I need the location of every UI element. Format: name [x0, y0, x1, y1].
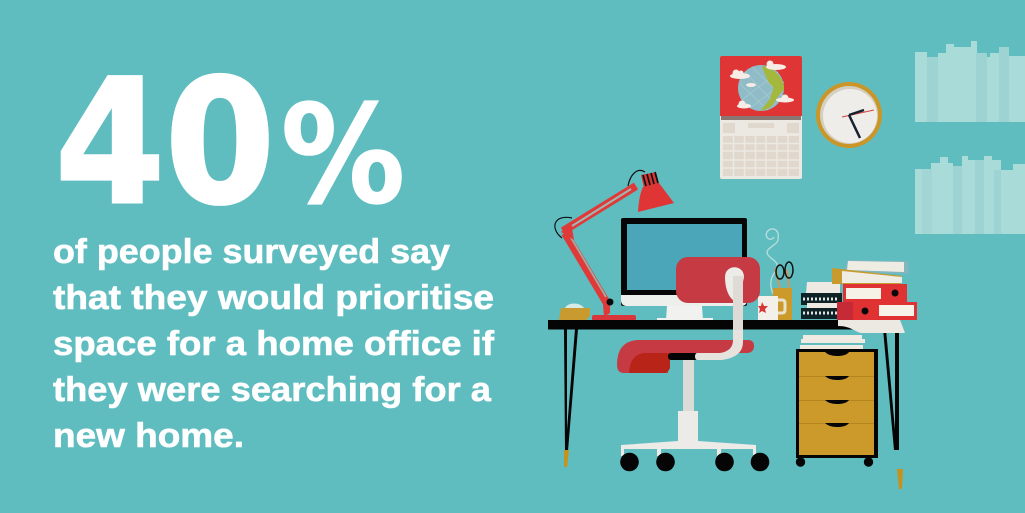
- icon: lower bookshelf: [915, 156, 1025, 234]
- icon: desk lamp: [555, 170, 674, 321]
- description text block: [53, 233, 495, 455]
- description text block: they were searching for a: [53, 371, 492, 409]
- description text block: space for a home office if: [53, 325, 495, 363]
- description text block: that they would prioritise: [53, 279, 494, 317]
- headline statistic: 40%: 40: [55, 42, 275, 243]
- icon: letter tray with papers: [801, 282, 842, 319]
- description text block: new home.: [53, 417, 244, 455]
- icon: papers on drawer unit: [800, 335, 865, 349]
- icon: stack of folders: [832, 260, 917, 320]
- icon: upper bookshelf: [915, 41, 1025, 122]
- icon: desk: [548, 320, 903, 489]
- icon: red office chair: [617, 257, 769, 471]
- icon: computer monitor: [621, 218, 747, 320]
- icon: papers on desk edge: [838, 320, 905, 333]
- globe: [738, 65, 784, 111]
- icon: steam swirl: [766, 229, 778, 294]
- icon: tape dispenser: [559, 304, 590, 320]
- headline statistic: 40%: [55, 42, 405, 243]
- icon: coffee mug with star: [758, 296, 785, 320]
- headline statistic: 40%: %: [281, 77, 405, 235]
- icon: wall calendar: [720, 56, 802, 179]
- icon: pen pot with scissors: [773, 262, 793, 320]
- icon: yellow drawer unit: [796, 349, 878, 467]
- clouds: [730, 60, 794, 108]
- description text block: of people surveyed say: [53, 233, 450, 271]
- icon: wall clock: [816, 82, 882, 148]
